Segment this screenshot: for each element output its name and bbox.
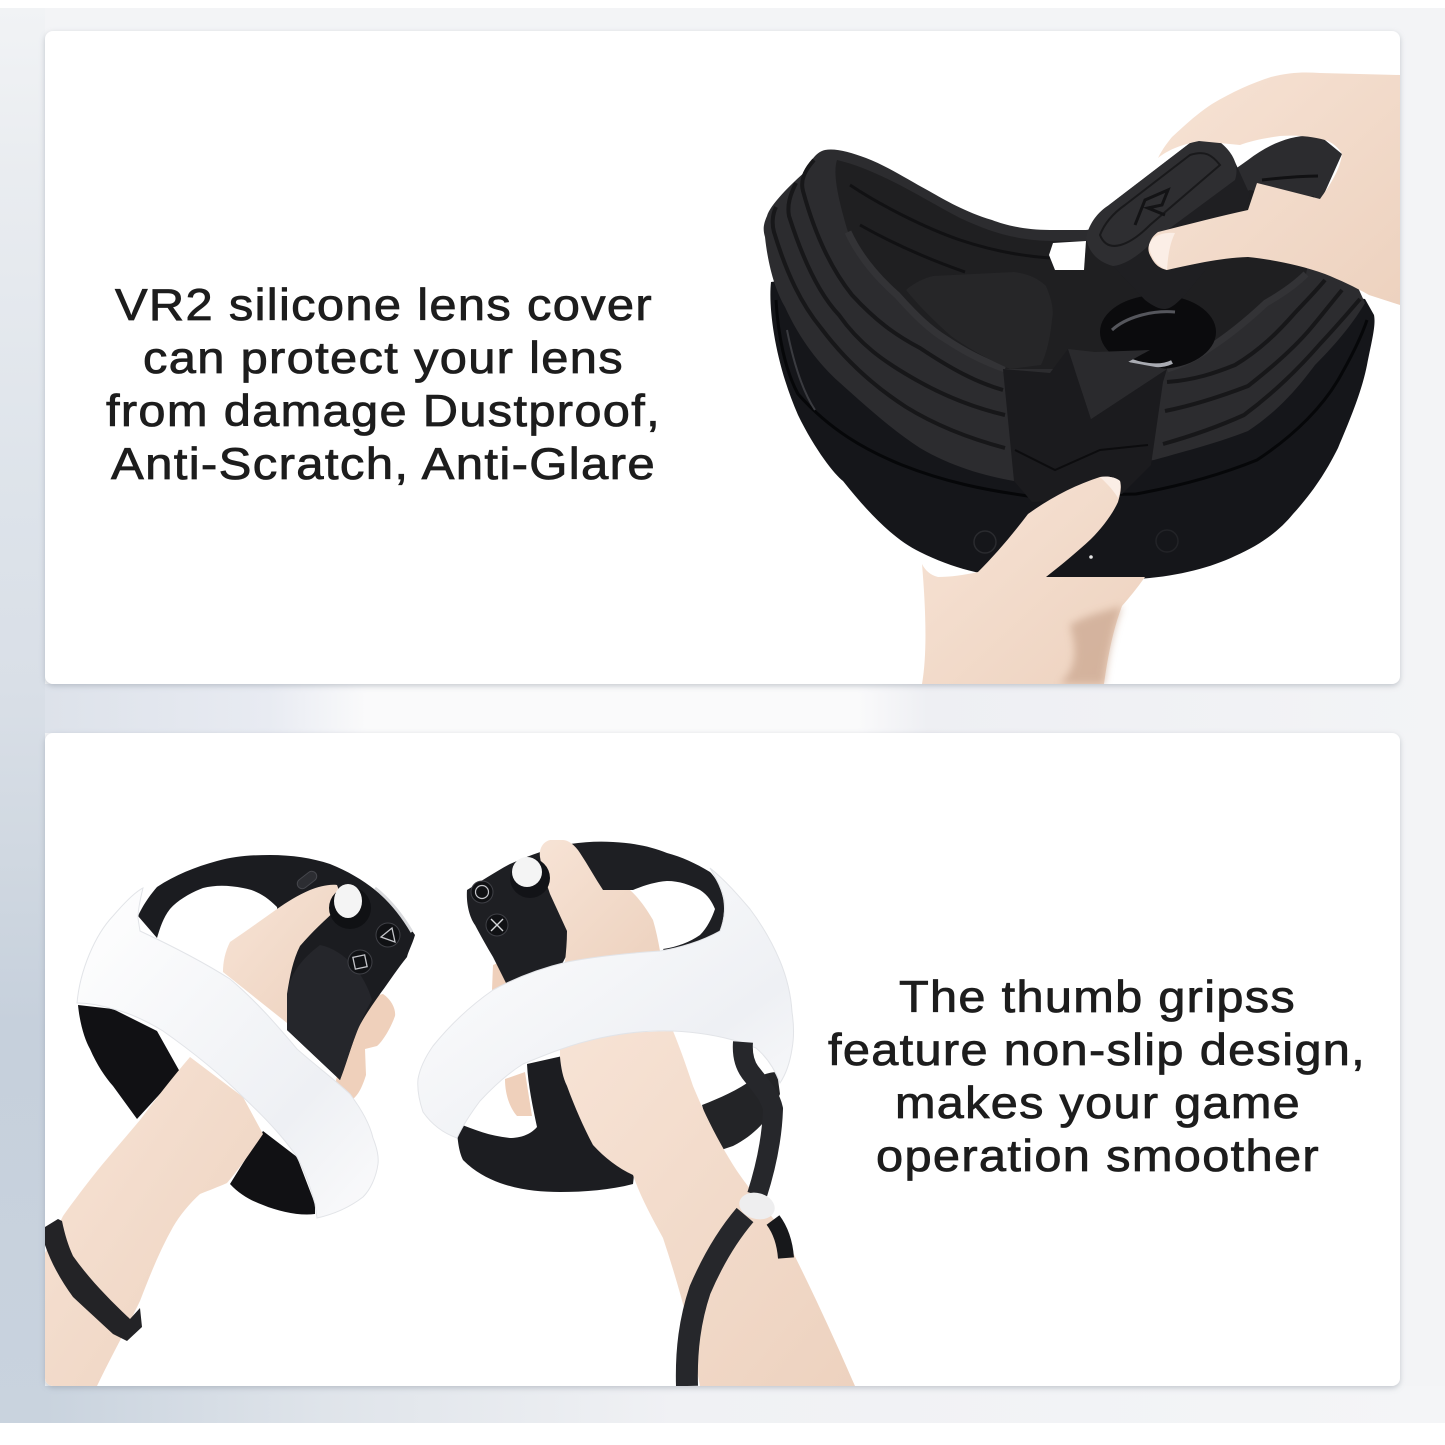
finger nails and headset details [974,233,1178,559]
shell rim highlight [776,300,1367,496]
illustration: VR headset with silicone cover held by hands [764,72,1400,684]
text block: thumb grips description: makes your game [895,1079,1301,1128]
thumbstick [510,857,550,898]
gasket ridges [773,160,1360,448]
silicone gasket [764,135,1365,481]
text block: lens cover description: can protect your lens [143,334,624,383]
controller top arc [467,842,724,985]
exposed lens [1100,295,1216,369]
create button [296,870,318,890]
text block: lens cover description: from damage Dustproof, [106,387,661,436]
text block: thumb grips description: feature non-slip design, [828,1026,1366,1075]
text block: lens cover description: VR2 silicone lens cover [115,281,653,330]
text block: lens cover description: Anti-Scratch, Anti-Glare [111,440,656,489]
circle button [471,881,493,903]
text block: thumb grips description: The thumb gripss [899,973,1296,1022]
forearm [45,1057,263,1386]
controller white edge highlight [375,888,412,932]
thumbstick [329,884,371,929]
lower hand [922,477,1145,684]
text block: thumb grips description [828,973,1366,1181]
installed left lens cover [992,360,1006,367]
controller black grip [138,855,415,1080]
text block: thumb grips description: operation smoother [876,1132,1320,1181]
hand and thumb [540,840,660,962]
hand shadow between fingers [1060,606,1122,684]
forearm [560,1031,855,1386]
back ring, right lower [702,1072,780,1152]
white ring band [77,888,378,1218]
square button [348,950,372,974]
cross button [486,914,508,936]
controller bottom [457,1055,640,1192]
gasket opening [835,160,1320,369]
nose flap [1003,349,1167,502]
hand fingers [335,994,395,1099]
hand fingers [492,960,532,1116]
inner black ring, right [230,1131,315,1215]
removed lens cover marked R [1086,140,1250,309]
panel: thumb grips [45,733,1400,1386]
illustration: left controller in hand [45,855,415,1386]
white ring band [418,868,794,1138]
panel: lens cover [45,31,1400,684]
inner black ring, left [78,1005,180,1119]
gasket inner lip [848,232,1306,369]
lanyard strap [687,1042,786,1386]
illustration: right controller in hand [418,840,855,1386]
headset shell [770,250,1375,579]
lanyard slider [736,1189,778,1223]
wrist strap [45,1219,142,1341]
gasket inner wall ribs [850,176,1318,272]
hand and thumb [223,885,339,1023]
nose notch [1049,241,1086,270]
upper hand [1148,72,1400,305]
triangle button [376,923,400,947]
text block: lens cover description [106,281,661,489]
